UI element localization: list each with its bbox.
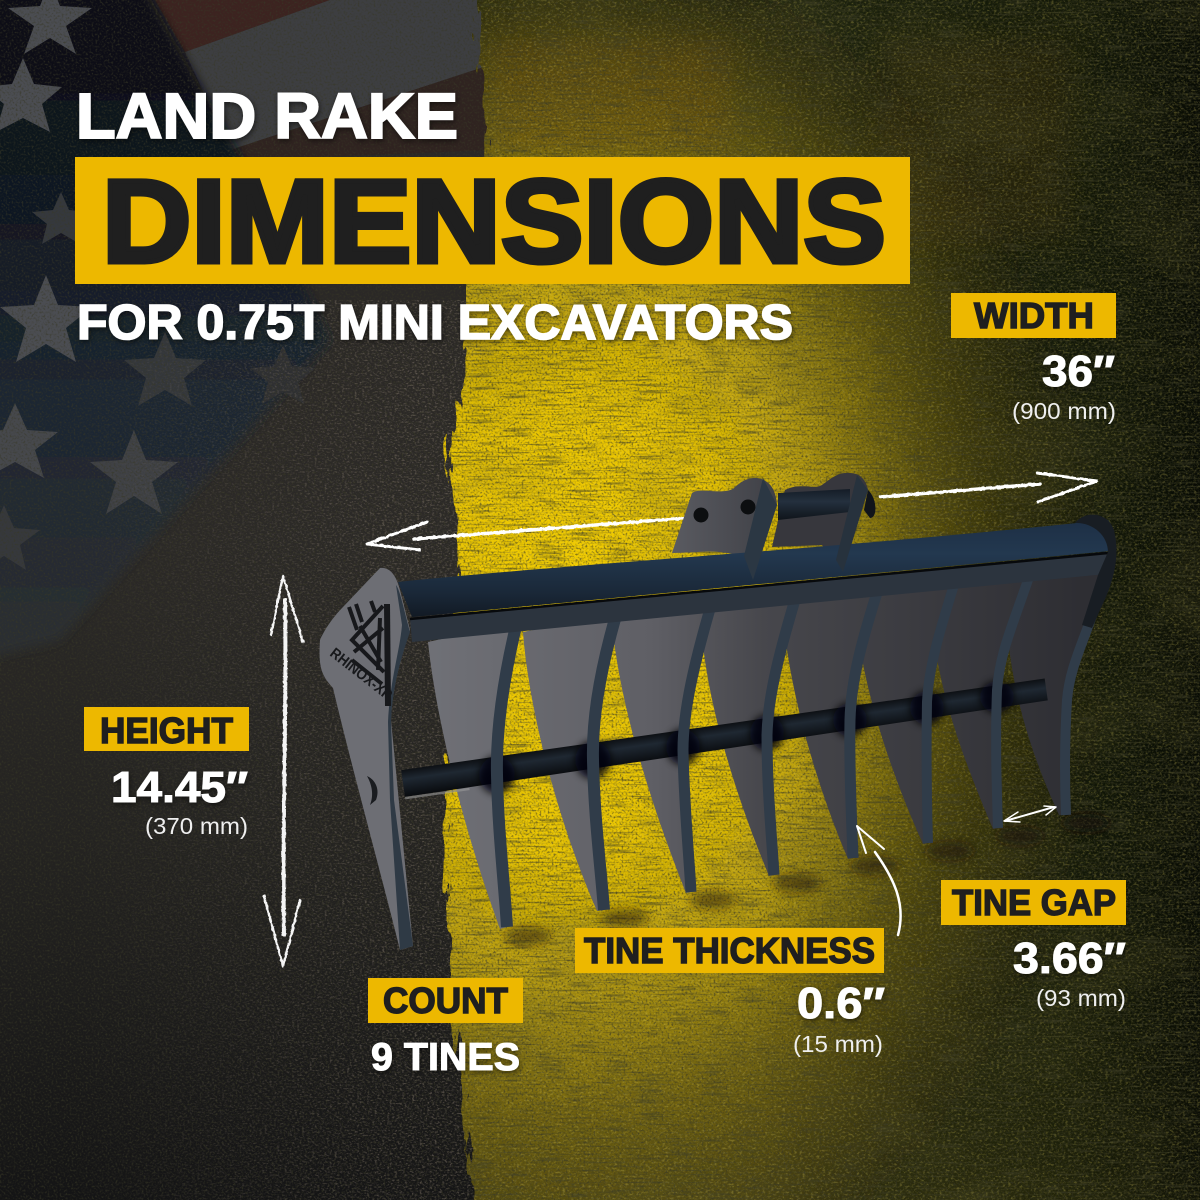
label: height: (370 mm) xyxy=(145,813,248,839)
background: dark flag side xyxy=(0,0,491,1200)
label: count xyxy=(368,978,523,1079)
title: land rake: LAND RAKE xyxy=(76,80,458,152)
title: subtitle: FOR 0.75T MINI EXCAVATORS xyxy=(77,296,793,350)
arrow: tine gap xyxy=(1004,806,1056,822)
rake product render xyxy=(320,473,1116,950)
arrow: width xyxy=(367,473,1097,550)
label: tine thickness: 0.6″ xyxy=(797,979,885,1028)
label: tine thickness: TINE THICKNESS xyxy=(584,930,875,971)
label: tine gap: (93 mm) xyxy=(1036,985,1126,1011)
title: dimensions banner: DIMENSIONS xyxy=(102,156,886,288)
tine blades xyxy=(428,565,1100,929)
label: count: COUNT xyxy=(383,980,508,1021)
label: tine thickness xyxy=(575,928,885,1057)
top tube and strip xyxy=(398,475,1116,642)
label: tine gap xyxy=(941,880,1126,1011)
label: tine gap: 3.66″ xyxy=(1013,934,1126,983)
flag stars xyxy=(0,0,316,570)
label: count: 9 TINES xyxy=(371,1036,520,1079)
label: width: (900 mm) xyxy=(1012,398,1116,424)
arrow: tine thickness xyxy=(857,826,901,935)
label: width: WIDTH xyxy=(974,295,1094,336)
label: height: 14.45″ xyxy=(111,763,248,812)
logo: rhinox-xp wordmark: RHINOX-XP xyxy=(327,645,395,704)
label: height: HEIGHT xyxy=(100,710,233,751)
label: width xyxy=(951,293,1116,424)
logo: rhinox mark xyxy=(349,601,388,706)
arrow: height xyxy=(264,576,303,966)
label: width: 36″ xyxy=(1042,347,1115,396)
rear cross bar xyxy=(401,679,1049,799)
label: tine thickness: (15 mm) xyxy=(793,1031,883,1057)
label: tine gap: TINE GAP xyxy=(952,882,1116,923)
ground shadows xyxy=(504,814,1110,945)
left side plate with logo xyxy=(320,568,413,950)
label: height xyxy=(84,707,249,839)
mounting bracket xyxy=(672,473,875,580)
tine ribs xyxy=(497,568,1097,927)
